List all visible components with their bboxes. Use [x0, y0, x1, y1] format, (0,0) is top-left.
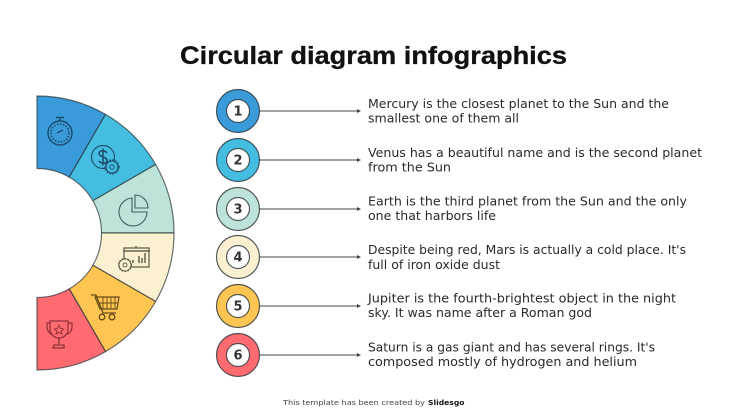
- panel: segment 5 orange: [69, 265, 156, 352]
- badge 1: 1: [233, 105, 243, 120]
- arrowhead 5: [357, 304, 361, 308]
- icon: pie chart: [119, 195, 148, 226]
- item 3: [216, 188, 687, 230]
- description 4: Despite being red, Mars is actually a cold place. It's: [368, 243, 686, 257]
- arrowhead 6: [357, 353, 361, 357]
- item 6: [216, 334, 655, 376]
- description 6: [368, 340, 655, 369]
- arrowhead 4: [357, 255, 361, 259]
- description 5: [367, 292, 676, 320]
- item 5: [216, 284, 676, 328]
- title: Circular diagram infographics: [180, 42, 567, 70]
- description 6: Saturn is a gas giant and has several rings. It's: [368, 340, 655, 354]
- icon: trophy: [47, 321, 72, 348]
- description 4: full of iron oxide dust: [368, 258, 500, 272]
- panel: segment 2 cyan: [69, 114, 156, 201]
- badge 3: [216, 188, 260, 230]
- item 4: [216, 236, 686, 278]
- description 2: Venus has a beautiful name and is the second planet: [368, 146, 702, 160]
- item 1: [216, 90, 669, 132]
- badge 2: 2: [233, 154, 243, 169]
- badge 6: 6: [233, 349, 243, 364]
- badge 4: [216, 236, 260, 278]
- icon: stopwatch: [48, 118, 72, 145]
- arrowhead 3: [357, 207, 361, 211]
- circular diagram: [37, 96, 174, 370]
- description 3: Earth is the third planet from the Sun and the only: [368, 194, 687, 208]
- badge 5: [216, 284, 260, 328]
- description 1: [368, 97, 669, 126]
- description 3: [368, 194, 687, 223]
- footer credit: Slidesgo: [428, 398, 464, 407]
- arrow 1: [259, 110, 358, 112]
- icon: presentation board: [118, 246, 150, 272]
- badge 6: [216, 334, 260, 376]
- panel: segment 6 red: [37, 289, 106, 370]
- panel: segment 1 blue: [37, 96, 106, 177]
- arrow 3: [259, 208, 358, 210]
- panel: segment 4 cream: [93, 233, 174, 302]
- description 6: composed mostly of hydrogen and helium: [368, 355, 637, 369]
- item 2: [216, 138, 702, 182]
- description 5: Jupiter is the fourth-brightest object in the night: [367, 292, 676, 306]
- badge 1: [216, 90, 260, 132]
- arrowhead 1: [357, 109, 361, 113]
- panel: segment 3 mint: [93, 164, 174, 233]
- badge 5: 5: [233, 300, 243, 315]
- description 2: from the Sun: [368, 160, 451, 174]
- description 1: Mercury is the closest planet to the Sun and the: [368, 97, 669, 111]
- description 2: [368, 146, 702, 174]
- icon: dollar with gear: [92, 146, 119, 174]
- description 5: sky. It was name after a Roman god: [368, 306, 592, 320]
- badge 3: 3: [233, 203, 243, 218]
- arrow 2: [259, 159, 358, 161]
- description 4: [368, 243, 686, 272]
- arrow 5: [259, 305, 358, 307]
- badge 4: 4: [233, 251, 243, 266]
- arrow 6: [259, 354, 358, 356]
- arrow 4: [259, 256, 358, 258]
- badge 2: [216, 138, 260, 182]
- description 1: smallest one of them all: [368, 112, 519, 126]
- icon: shopping cart: [91, 295, 119, 320]
- footer credit: This template has been created by: [282, 398, 426, 407]
- footer credit: [282, 398, 464, 407]
- description 3: one that harbors life: [368, 209, 496, 223]
- arrowhead 2: [357, 158, 361, 162]
